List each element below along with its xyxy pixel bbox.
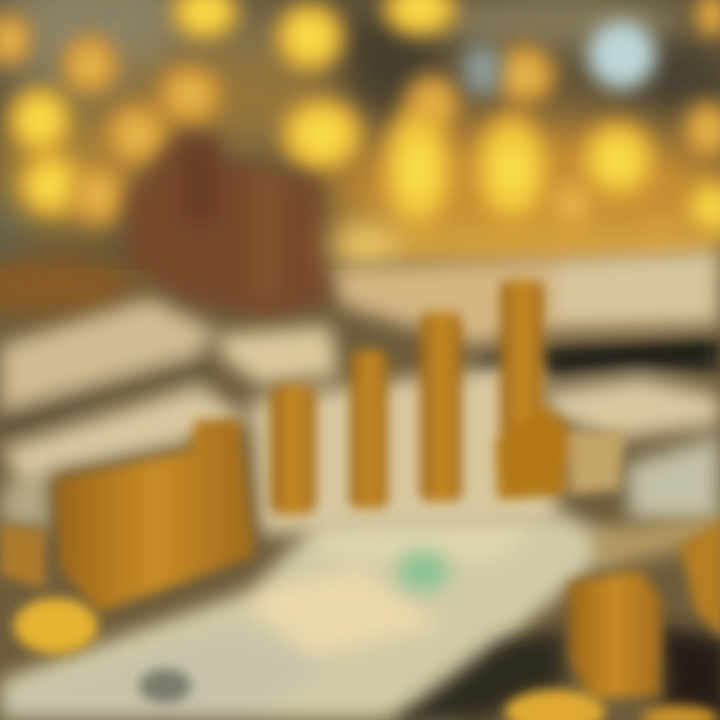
paper stacks: left [0,298,560,535]
paper sheets: bottom foreground [0,515,620,720]
gold coin: lower left [14,598,98,654]
warm glow behind lights [0,50,720,260]
brown block behind the coins [125,135,332,318]
paper stacks: upper right [335,250,720,525]
coin stacks: right foreground [568,518,720,700]
dark shadow areas at bottom [390,515,720,720]
coin stacks: centre columns [270,280,625,515]
small grey mark on paper [139,669,191,703]
bokeh: glowing yellow lights [0,0,720,247]
bokeh: pale blue lights [462,21,656,96]
small green note mark [397,551,449,591]
gold coins: bottom edge [505,690,718,720]
coin stack: large left [0,420,255,612]
warm band and left brown coins [0,221,720,313]
